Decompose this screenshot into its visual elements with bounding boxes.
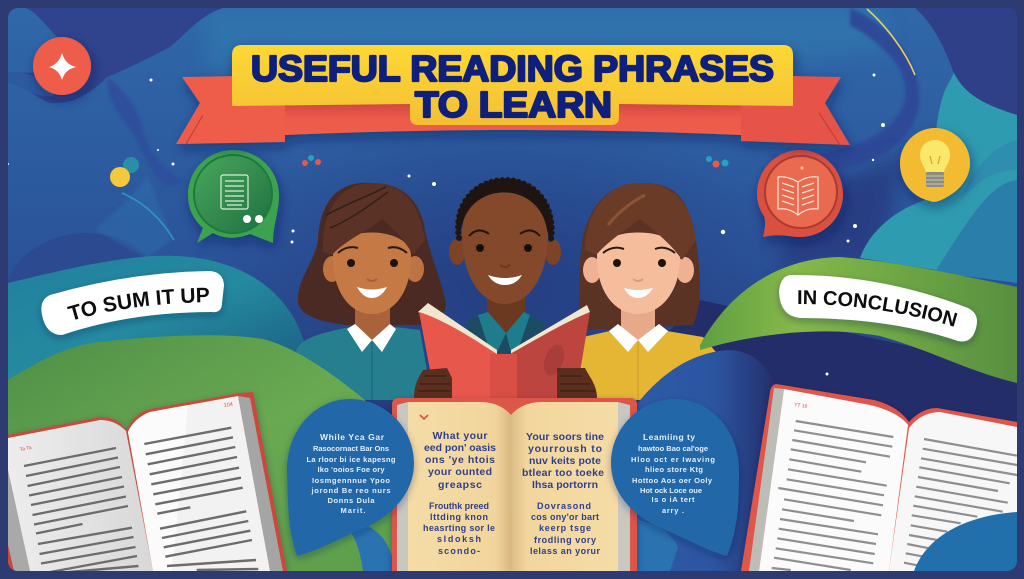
left speech bubble: La rloor bi ice kapesng [306,455,396,464]
right page text: btlear too toeke [522,467,604,479]
right speech bubble: Leamiing ty [643,432,695,442]
left page text: lttding knon [430,512,488,522]
left page text: greapsc [438,479,482,491]
red book held by the children [414,303,597,402]
icon: red book speech bubble [757,150,843,237]
open book bottom left: Ta Ta [19,445,32,453]
left green hill [8,335,420,571]
right speech bubble: Hottoo Aos oer Ooly [632,476,713,485]
small dots near speech bubbles [302,155,728,168]
blue stream below left bubble [352,526,392,571]
right page text: cos ony'or bart [531,512,599,522]
open book bottom right: YT 16 [794,402,808,410]
left page text [423,430,496,556]
right speech bubble: Hloo oct er Iwaving [631,455,715,464]
central open book [392,398,637,578]
left speech bubble: jorond Be reo nurs [310,486,390,495]
left speech bubble: Rasocornact Bar Ons [313,444,389,453]
left speech bubble: Donns Dula [328,496,375,505]
left page text: What your [432,430,488,442]
right page text: frodling vory [534,535,596,545]
right speech bubble: arry . [662,506,684,515]
label: in conclusion [775,274,980,348]
right page text [522,431,604,556]
girl on the right [579,183,716,400]
right page text: Dovrasond [537,501,591,511]
title text [252,54,774,118]
left teal band [8,256,305,380]
icon: light bulb [900,128,970,202]
label: to sum it up: TO SUM IT UP [67,288,209,320]
right page text: yourroush to [528,443,602,455]
right speech bubble: Is o iA tert [652,495,695,504]
left speech bubble [287,399,414,556]
left page text: eed pon' oasis [424,442,496,454]
right green band [700,257,1017,383]
decorative circles and arc [110,157,174,240]
right page text: keerp tsge [539,523,591,533]
icon: star badge [33,37,91,95]
corner shape [914,512,1017,571]
open book bottom left: 104 [223,402,233,409]
icon: green document speech bubble [188,150,279,243]
right speech bubble: hlieo store Ktg [645,465,703,474]
right page text: Ihsa portorrn [532,479,598,491]
left speech bubble: Iosmgennnue Ypoo [312,476,390,485]
right speech bubble: Hot ock Loce oue [640,486,702,495]
left page text: ons 'ye htois [425,454,495,466]
right blue hill [637,350,768,571]
left page text: your ounted [428,466,492,478]
left page text: scondo- [438,546,480,556]
left speech bubble: Marit. [340,506,366,515]
right page text: nuv keits pote [529,455,601,467]
open book bottom left [8,392,287,573]
curved accent line [867,9,915,75]
right page text: Your soors tine [526,431,604,443]
right speech bubble [611,399,739,556]
right speech bubble: hawtoo Bao cal'oge [638,444,708,453]
title ribbon [176,45,850,145]
label: in conclusion: IN CONCLUSION [798,290,958,327]
label: to sum it up [38,270,227,341]
blue stream below right bubble [637,516,678,571]
left speech bubble: Iko 'ooios Foe ory [318,465,385,474]
boy in the middle [449,177,561,354]
left page text: Frouthk preed [429,501,489,511]
left page text: sldoksh [437,534,481,544]
title text: USEFUL READING PHRASES [251,48,774,89]
right page text: lelass an yorur [530,546,600,556]
girl on the left [296,183,446,400]
background [8,8,1017,422]
left page text: heasrting sor le [423,523,495,533]
title text: TO LEARN [415,84,612,125]
open book bottom right [741,384,1017,571]
left speech bubble: While Yca Gar [320,432,385,442]
sparkle dots [7,74,885,394]
